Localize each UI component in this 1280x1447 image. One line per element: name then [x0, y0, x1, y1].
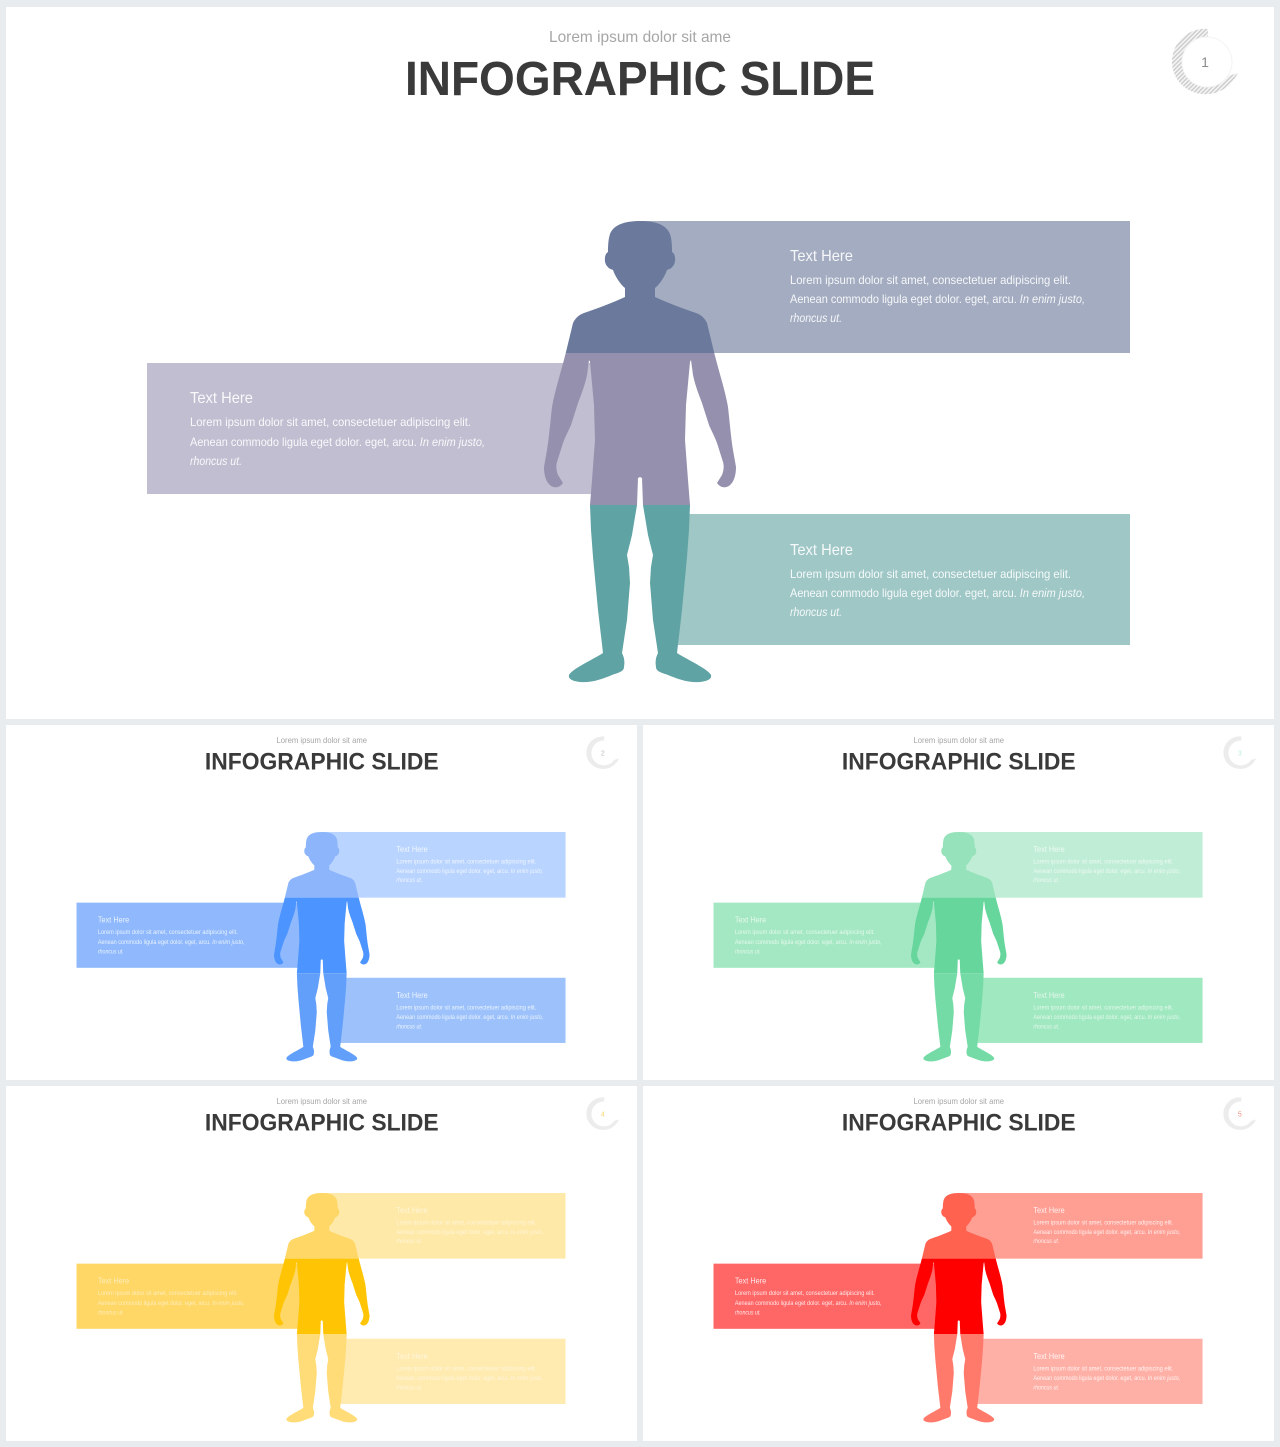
slide 1: slate, purple and teal — [6, 7, 1274, 719]
slide 4 bottom text panel: rhoncus ut. — [396, 1386, 422, 1392]
slide 1 page badge: 1 — [1201, 54, 1209, 70]
slide 5 page badge: 5 — [1238, 1111, 1242, 1118]
slide 5 top text panel — [959, 1193, 1203, 1259]
slide 3 top text panel: Lorem ipsum dolor sit amet, consectetuer adipiscing elit. — [1033, 859, 1174, 865]
slide 3 top text panel: Aenean commodo ligula eget dolor. eget, arcu. In enim justo, — [1033, 869, 1180, 875]
slide 3: green — [643, 725, 1274, 1080]
slide 5 human silhouette — [911, 1193, 1007, 1422]
slide 5 top text panel: rhoncus ut. — [1033, 1239, 1059, 1245]
slide 5 bottom text panel: rhoncus ut. — [1033, 1386, 1059, 1392]
slide 1 left text panel — [147, 363, 596, 494]
slide 4 human silhouette — [274, 1193, 370, 1422]
slide 4 left text panel — [77, 1264, 300, 1329]
slide 4 background — [6, 1086, 637, 1441]
slide 1 top text panel — [640, 221, 1130, 353]
slide 1 left text panel: Lorem ipsum dolor sit amet, consectetuer adipiscing elit. — [190, 415, 471, 429]
slide 5 bottom text panel: Lorem ipsum dolor sit amet, consectetuer adipiscing elit. — [1033, 1367, 1174, 1373]
slide 1 top text panel: Lorem ipsum dolor sit amet, consectetuer adipiscing elit. — [790, 273, 1071, 287]
slide 4 bottom text panel: Aenean commodo ligula eget dolor. eget, arcu. In enim justo, — [396, 1376, 543, 1382]
slide 1 bottom text panel: Lorem ipsum dolor sit amet, consectetuer adipiscing elit. — [790, 567, 1071, 581]
slide 5 left text panel: Lorem ipsum dolor sit amet, consectetuer adipiscing elit. — [735, 1291, 875, 1297]
slide 2 left text panel: Aenean commodo ligula eget dolor. eget, arcu. In enim justo, — [98, 940, 245, 946]
slide 1 bottom text panel: Aenean commodo ligula eget dolor. eget, arcu. In enim justo, — [790, 586, 1085, 600]
slide 3 subtitle: Lorem ipsum dolor sit ame — [913, 736, 1005, 745]
slide 5 content — [714, 1097, 1256, 1422]
slide 5 bottom text panel — [974, 1339, 1203, 1404]
slide 2 subtitle: Lorem ipsum dolor sit ame — [276, 736, 368, 745]
slide 2 top text panel — [322, 832, 566, 898]
slide 2 left text panel: Text Here — [98, 916, 130, 925]
slide 3 bottom text panel — [974, 978, 1203, 1043]
slide 3 bottom text panel: Aenean commodo ligula eget dolor. eget, arcu. In enim justo, — [1033, 1015, 1180, 1021]
slide 4 bottom text panel: Text Here — [396, 1352, 428, 1361]
slide 4 content — [77, 1097, 619, 1422]
slide 4 top text panel: Lorem ipsum dolor sit amet, consectetuer adipiscing elit. — [396, 1220, 537, 1226]
slide 2 left text panel: rhoncus ut. — [98, 949, 124, 955]
slide 1 human silhouette — [544, 221, 736, 682]
slide 3 page badge: 3 — [1238, 750, 1242, 757]
slide 1 bottom text panel: rhoncus ut. — [790, 605, 842, 619]
slide 4 top text panel — [322, 1193, 566, 1259]
slide 2 title: INFOGRAPHIC SLIDE — [205, 748, 439, 775]
slide 5 top text panel: Lorem ipsum dolor sit amet, consectetuer adipiscing elit. — [1033, 1220, 1174, 1226]
slide 5 subtitle: Lorem ipsum dolor sit ame — [913, 1097, 1005, 1106]
slide 1 left text panel: Text Here — [190, 390, 253, 407]
slide 3 left text panel: Text Here — [735, 916, 767, 925]
slide 5 background — [643, 1086, 1274, 1441]
slide 1 subtitle: Lorem ipsum dolor sit ame — [549, 29, 731, 46]
slide 4 page badge — [586, 1097, 619, 1130]
slide 4 left text panel: Aenean commodo ligula eget dolor. eget, arcu. In enim justo, — [98, 1301, 245, 1307]
slide 3 human silhouette — [911, 832, 1007, 1061]
slide 4 bottom text panel: Lorem ipsum dolor sit amet, consectetuer adipiscing elit. — [396, 1367, 537, 1373]
slide 3 bottom text panel: Lorem ipsum dolor sit amet, consectetuer adipiscing elit. — [1033, 1006, 1174, 1012]
slide 2 background — [6, 725, 637, 1080]
slide 1 left text panel: Aenean commodo ligula eget dolor. eget, arcu. In enim justo, — [190, 435, 485, 449]
slide 5 title: INFOGRAPHIC SLIDE — [842, 1109, 1076, 1136]
slide 2 human silhouette — [274, 832, 370, 1061]
slide 5 bottom text panel: Aenean commodo ligula eget dolor. eget, arcu. In enim justo, — [1033, 1376, 1180, 1382]
slide 4 left text panel: rhoncus ut. — [98, 1310, 124, 1316]
slide 2 left text panel — [77, 903, 300, 968]
slide 4 subtitle: Lorem ipsum dolor sit ame — [276, 1097, 368, 1106]
slide 4 top text panel: Text Here — [396, 1206, 428, 1215]
slide 3 top text panel — [959, 832, 1203, 898]
slide 3 left text panel: Aenean commodo ligula eget dolor. eget, arcu. In enim justo, — [735, 940, 882, 946]
slide 4 left text panel: Text Here — [98, 1277, 130, 1286]
slide 1 top text panel: Text Here — [790, 248, 853, 265]
slide 5 top text panel: Text Here — [1033, 1206, 1065, 1215]
slide 1 top text panel: Aenean commodo ligula eget dolor. eget, arcu. In enim justo, — [790, 292, 1085, 306]
slide 3 left text panel — [714, 903, 937, 968]
slide 1 title: INFOGRAPHIC SLIDE — [405, 53, 875, 106]
slide 1 page badge — [1172, 29, 1238, 94]
slide 2 top text panel: rhoncus ut. — [396, 878, 422, 884]
slide 5 page badge — [1223, 1097, 1256, 1130]
slide 3 left text panel: rhoncus ut. — [735, 949, 761, 955]
slide 1 left text panel: rhoncus ut. — [190, 454, 242, 468]
slide 3 bottom text panel: rhoncus ut. — [1033, 1025, 1059, 1031]
slide 2 page badge — [586, 736, 619, 769]
slide 5 bottom text panel: Text Here — [1033, 1352, 1065, 1361]
slide 4 top text panel: rhoncus ut. — [396, 1239, 422, 1245]
slide 2 top text panel: Text Here — [396, 845, 428, 854]
slide 3 content — [714, 736, 1256, 1061]
slide 5 left text panel — [714, 1264, 937, 1329]
slide 2 top text panel: Lorem ipsum dolor sit amet, consectetuer adipiscing elit. — [396, 859, 537, 865]
slide 2 bottom text panel: rhoncus ut. — [396, 1025, 422, 1031]
slide 2 page badge: 2 — [601, 750, 605, 757]
slide 1 background — [6, 7, 1274, 719]
slide 3 left text panel: Lorem ipsum dolor sit amet, consectetuer adipiscing elit. — [735, 930, 875, 936]
slide 2 bottom text panel: Text Here — [396, 991, 428, 1000]
slide 4 top text panel: Aenean commodo ligula eget dolor. eget, arcu. In enim justo, — [396, 1230, 543, 1236]
slide 4: yellow — [6, 1086, 637, 1441]
slide 2 bottom text panel: Lorem ipsum dolor sit amet, consectetuer adipiscing elit. — [396, 1006, 537, 1012]
slide 3 top text panel: Text Here — [1033, 845, 1065, 854]
slide 5 top text panel: Aenean commodo ligula eget dolor. eget, arcu. In enim justo, — [1033, 1230, 1180, 1236]
slide 1 top text panel: rhoncus ut. — [790, 311, 842, 325]
slide 3 page badge — [1223, 736, 1256, 769]
slide 3 title: INFOGRAPHIC SLIDE — [842, 748, 1076, 775]
slide 2 left text panel: Lorem ipsum dolor sit amet, consectetuer adipiscing elit. — [98, 930, 238, 936]
slide 2 bottom text panel: Aenean commodo ligula eget dolor. eget, arcu. In enim justo, — [396, 1015, 543, 1021]
slide 2: blue — [6, 725, 637, 1080]
slide 5 left text panel: Aenean commodo ligula eget dolor. eget, arcu. In enim justo, — [735, 1301, 882, 1307]
slide 5 left text panel: rhoncus ut. — [735, 1310, 761, 1316]
slide 2 content — [77, 736, 619, 1061]
slide 3 background — [643, 725, 1274, 1080]
slide 5: red — [643, 1086, 1274, 1441]
slide 3 top text panel: rhoncus ut. — [1033, 878, 1059, 884]
slide 2 top text panel: Aenean commodo ligula eget dolor. eget, arcu. In enim justo, — [396, 869, 543, 875]
slide 4 page badge: 4 — [601, 1111, 605, 1118]
slide 2 bottom text panel — [337, 978, 566, 1043]
slide 1 bottom text panel: Text Here — [790, 542, 853, 559]
slide 4 title: INFOGRAPHIC SLIDE — [205, 1109, 439, 1136]
slide 5 left text panel: Text Here — [735, 1277, 767, 1286]
slide 4 bottom text panel — [337, 1339, 566, 1404]
slide 4 left text panel: Lorem ipsum dolor sit amet, consectetuer adipiscing elit. — [98, 1291, 238, 1297]
slide 1 bottom text panel — [670, 514, 1130, 645]
slide 3 bottom text panel: Text Here — [1033, 991, 1065, 1000]
